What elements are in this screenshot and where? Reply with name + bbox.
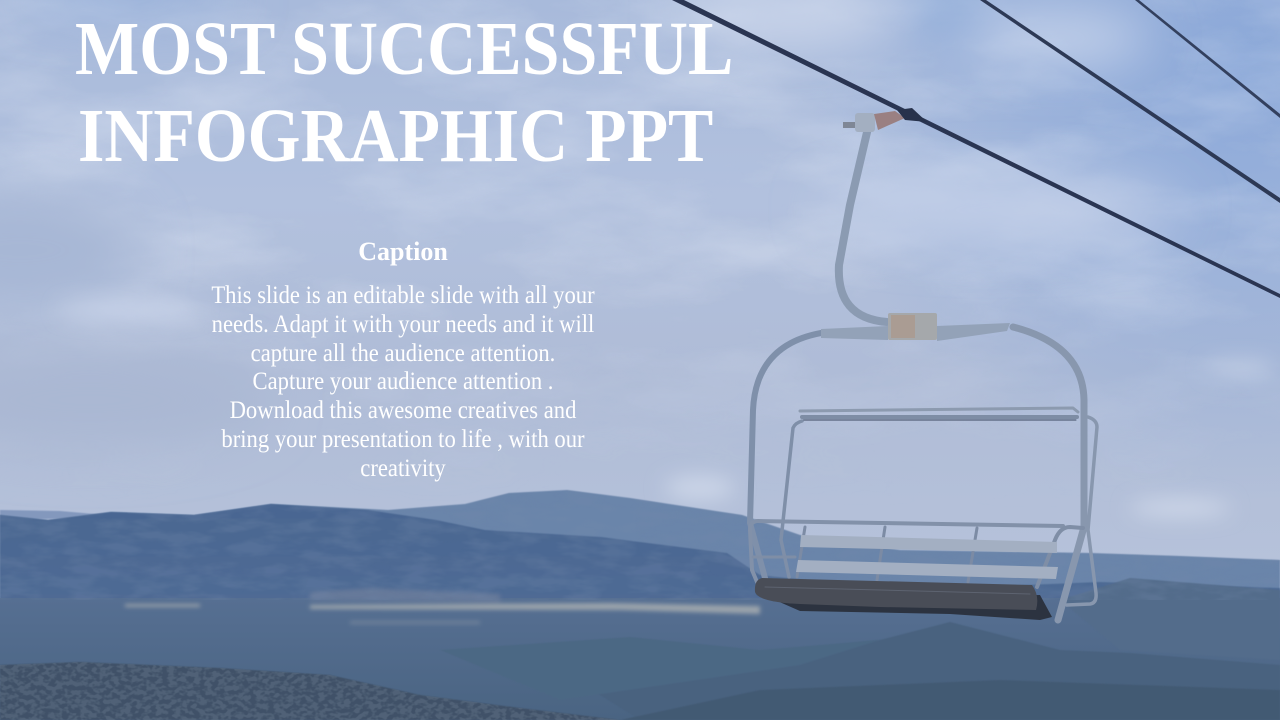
sky	[0, 0, 1280, 570]
seat rail	[750, 521, 1063, 582]
title: MOST SUCCESSFUL	[75, 7, 733, 91]
mountains and valley	[0, 490, 1280, 720]
caption body text: bring your presentation to life , with our	[221, 426, 585, 453]
distant ridge	[0, 510, 130, 520]
right-hand hills	[560, 622, 1280, 720]
valley floor	[0, 598, 1280, 720]
chairlift	[750, 108, 1097, 620]
dark foreground	[0, 662, 620, 720]
title	[75, 7, 733, 178]
caption body text	[211, 282, 595, 482]
dark front ridge	[0, 504, 1280, 640]
cables	[672, 0, 1280, 298]
clamp	[888, 313, 937, 340]
title: INFOGRAPHIC PPT	[78, 94, 713, 178]
land texture	[0, 507, 1280, 598]
cable grip	[843, 108, 927, 132]
caption body text: capture all the audience attention.	[251, 340, 555, 367]
sunlit fields	[125, 588, 760, 624]
caption heading: Caption	[358, 237, 448, 266]
caption body text: This slide is an editable slide with all your	[211, 282, 595, 309]
seat cushion	[755, 578, 1052, 620]
caption body text: Capture your audience attention .	[253, 368, 553, 395]
safety bars	[800, 408, 1078, 412]
caption body text: Download this awesome creatives and	[230, 397, 576, 424]
back frame	[781, 421, 802, 577]
hanger arm	[839, 128, 887, 322]
seat slats	[800, 535, 1057, 553]
caption body text: creativity	[360, 455, 446, 482]
upper frame	[750, 333, 821, 578]
caption body text: needs. Adapt it with your needs and it will	[212, 311, 594, 338]
